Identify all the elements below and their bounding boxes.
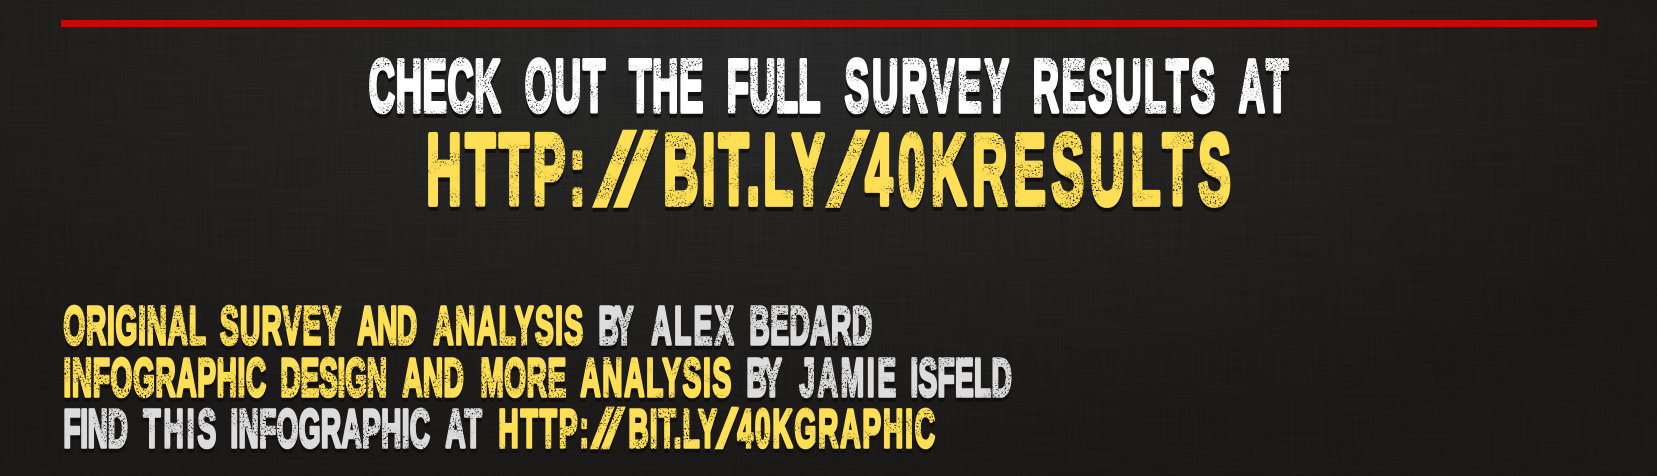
credit line 1: survey author — [63, 296, 872, 357]
credit line 2: design author: MORE — [480, 348, 566, 409]
credit line 1: survey author: BEDARD — [749, 296, 872, 357]
credit line 3: infographic link: HTTP: — [498, 399, 589, 460]
heading: check out the full survey results: CHECK — [369, 45, 501, 128]
credit line 3: infographic link: AT — [445, 399, 482, 460]
credits block — [63, 296, 1012, 460]
credit line 2: design author: AND — [402, 348, 464, 409]
heading: check out the full survey results: FULL — [727, 45, 820, 128]
credit line 3: infographic link: FIND — [63, 399, 128, 460]
credit line 3: infographic link: INFOGRAPHIC — [230, 399, 430, 460]
credit line 2: design author: BY — [746, 348, 782, 409]
heading: check out the full survey results: THE — [629, 45, 703, 128]
results URL: 40KRESULTS — [865, 114, 1231, 226]
credit line 3: infographic link: // — [588, 399, 627, 459]
credit line 2: design author: DESIGN — [280, 348, 387, 409]
credit line 1: survey author: ALEX — [651, 296, 734, 357]
credit line 3: infographic link: 40KGRAPHIC — [737, 399, 935, 460]
red divider bar — [61, 20, 1597, 27]
results URL: BIT.LY — [663, 114, 825, 226]
credit line 2: design author — [63, 348, 1012, 409]
credit line 1: survey author: SURVEY — [220, 296, 341, 357]
credit line 2: design author: ISFELD — [910, 348, 1012, 409]
credit line 3: infographic link — [63, 399, 935, 460]
heading: check out the full survey results: OUT — [525, 45, 605, 128]
heading: check out the full survey results: SURVEY — [845, 45, 1009, 128]
results URL: // — [589, 114, 660, 225]
credit line 1: survey author: ORIGINAL — [63, 296, 206, 357]
credit line 3: infographic link: / — [713, 399, 741, 459]
heading: check out the full survey results — [369, 45, 1288, 128]
credit line 3: infographic link: THIS — [143, 399, 216, 460]
heading: check out the full survey results: RESULTS — [1033, 45, 1215, 128]
credit line 1: survey author: AND — [357, 296, 417, 357]
credit line 3: infographic link: BIT.LY — [628, 399, 717, 460]
heading: check out the full survey results: AT — [1239, 45, 1288, 128]
results URL — [426, 114, 1231, 226]
credit line 1: survey author: ANALYSIS — [433, 296, 583, 357]
results URL: HTTP: — [426, 114, 586, 226]
credit line 2: design author: JAMIE — [799, 348, 896, 409]
credit line 1: survey author: BY — [598, 296, 634, 357]
credit line 2: design author: ANALYSIS — [580, 348, 731, 409]
results URL: / — [822, 114, 873, 225]
credit line 2: design author: INFOGRAPHIC — [63, 348, 266, 409]
